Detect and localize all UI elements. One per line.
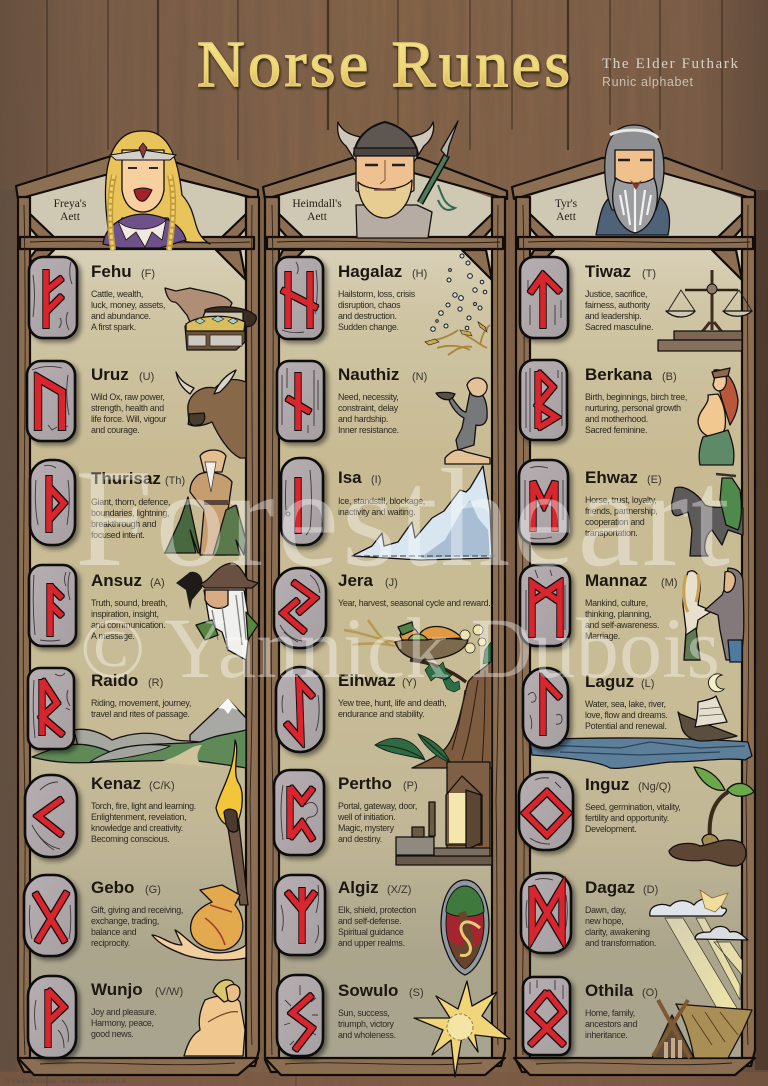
name: Jera	[338, 571, 374, 590]
letter: (X/Z)	[387, 884, 411, 896]
description: Torch, fire, light and learning.	[91, 801, 196, 811]
description: and transformation.	[585, 938, 656, 948]
letter: (D)	[643, 884, 658, 896]
rune row: Jera	[274, 568, 490, 660]
letter: (H)	[412, 268, 427, 280]
rune row: Eihwaz	[276, 642, 492, 768]
stone	[29, 257, 77, 338]
letter: (I)	[371, 474, 381, 486]
rune row: Raido	[28, 668, 246, 768]
subtitle: Runic alphabet	[602, 75, 694, 89]
rune row: Othila	[523, 977, 752, 1058]
portrait: Heimdall	[338, 121, 458, 238]
rune	[525, 792, 568, 835]
description: Water, sea, lake, river,	[585, 699, 666, 709]
description: and hardship.	[338, 414, 388, 424]
icon: cow and treasure chest	[165, 288, 256, 350]
description: Ice, standstill, blockage,	[338, 496, 425, 506]
stone	[523, 668, 568, 748]
stone	[277, 975, 323, 1056]
icon: horse and rider	[672, 474, 743, 556]
description: and destiny.	[338, 834, 382, 844]
description: and courage.	[91, 425, 139, 435]
stone	[520, 257, 568, 338]
description: and communication.	[91, 620, 165, 630]
name: Mannaz	[585, 571, 647, 590]
icon: giant in forest	[165, 450, 246, 555]
icon: shield with tree and serpent	[441, 880, 489, 975]
icon: hailstones on wheat	[425, 254, 490, 355]
name: Uruz	[91, 365, 129, 384]
rune row: Mannaz	[520, 565, 744, 662]
name: Ehwaz	[585, 468, 638, 487]
description: clarity, awakening	[585, 927, 650, 937]
description: Yew tree, hunt, life and death,	[338, 698, 446, 708]
description: cooperation and	[585, 517, 645, 527]
description: Sacred masculine.	[585, 322, 653, 332]
rune row: Nauthiz	[277, 361, 490, 464]
letter: (G)	[145, 884, 161, 896]
stone	[29, 565, 76, 646]
description: life force. Will, vigour	[91, 414, 166, 424]
name: Nauthiz	[338, 365, 399, 384]
name: Thurisaz	[91, 469, 161, 488]
label: Freya's Aett: Aett	[60, 211, 81, 223]
description: breakthrough and	[91, 519, 156, 529]
rune row: Dagaz	[521, 873, 748, 1010]
letter: (Th)	[165, 475, 185, 487]
letter: (O)	[642, 987, 658, 999]
letter: (P)	[403, 780, 418, 792]
description: transportation.	[585, 528, 638, 538]
rune row: Thurisaz	[30, 450, 246, 555]
name: Sowulo	[338, 981, 398, 1000]
description: constraint, delay	[338, 403, 399, 413]
description: disruption, chaos	[338, 300, 401, 310]
description: Potential and renewal.	[585, 721, 667, 731]
description: Home, family,	[585, 1008, 635, 1018]
letter: (M)	[661, 577, 678, 589]
rune row: Gebo	[24, 875, 246, 960]
stone	[275, 875, 325, 955]
rune row: Sowulo	[277, 975, 510, 1077]
description: Harmony, peace,	[91, 1018, 154, 1028]
description: Inner resistance.	[338, 425, 399, 435]
rune row: Ehwaz	[519, 460, 743, 556]
name: Kenaz	[91, 774, 141, 793]
description: Portal, gateway, door,	[338, 801, 417, 811]
icon: scales of justice	[658, 270, 752, 351]
description: Year, harvest, seasonal cycle and reward.	[338, 598, 490, 608]
stone	[25, 775, 77, 857]
description: Spiritual guidance	[338, 927, 404, 937]
description: Need, necessity,	[338, 392, 398, 402]
description: Birth, beginnings, birch tree,	[585, 392, 687, 402]
letter: (F)	[141, 268, 155, 280]
description: and upper realms.	[338, 938, 405, 948]
icon: Odin with raven	[176, 563, 258, 660]
watermark	[75, 441, 730, 696]
description: good news.	[91, 1029, 134, 1039]
name: Ansuz	[91, 571, 142, 590]
stone	[24, 875, 76, 956]
rune	[292, 995, 312, 1050]
description: Development.	[585, 824, 636, 834]
description: Horse, trust, loyalty,	[585, 495, 657, 505]
name: Gebo	[91, 878, 134, 897]
icon: sun	[414, 981, 510, 1077]
stone	[523, 977, 570, 1055]
stone	[27, 361, 75, 441]
icon: portal in tree	[396, 762, 492, 865]
description: inspiration, insight,	[91, 609, 159, 619]
stone	[276, 257, 323, 339]
icon: beggar woman with bowl	[436, 378, 490, 464]
name: Fehu	[91, 262, 132, 281]
letter: (B)	[662, 371, 677, 383]
description: well of initiation.	[337, 812, 395, 822]
description: inactivity and waiting.	[338, 507, 415, 517]
rune	[38, 378, 62, 430]
rune row: Ansuz	[29, 563, 258, 660]
name: Raido	[91, 671, 138, 690]
description: Mankind, culture,	[585, 598, 648, 608]
stone	[274, 568, 326, 648]
stone	[520, 565, 570, 646]
stone	[519, 460, 568, 544]
icon: man and woman holding hands	[683, 568, 744, 662]
panel: Tyr's Aett frame	[512, 158, 755, 1075]
portrait: Freya	[103, 131, 210, 250]
name: Berkana	[585, 365, 653, 384]
icon: spear	[420, 121, 458, 210]
description: and destruction.	[338, 311, 397, 321]
icon: pregnant woman	[698, 368, 738, 465]
description: A message.	[91, 631, 135, 641]
rune row: Uruz	[27, 361, 246, 458]
name: Algiz	[338, 878, 379, 897]
rune row: Berkana	[520, 360, 738, 465]
description: and motherhood.	[585, 414, 648, 424]
description: Becoming conscious.	[91, 834, 170, 844]
rune	[543, 680, 560, 735]
name: Eihwaz	[338, 671, 396, 690]
description: Enlightenment, revelation,	[91, 812, 186, 822]
rune	[287, 373, 310, 430]
stone	[276, 667, 324, 752]
rune	[46, 270, 62, 328]
rune	[538, 372, 556, 428]
name: Hagalaz	[338, 262, 402, 281]
description: love, flow and dreams.	[585, 710, 668, 720]
rune	[533, 482, 555, 531]
description: knowledge and creativity.	[91, 823, 183, 833]
description: A first spark.	[91, 322, 136, 332]
rune	[530, 992, 564, 1045]
description: exchange, trading,	[91, 916, 159, 926]
rune	[286, 682, 313, 740]
description: ancestors and	[585, 1019, 637, 1029]
description: Dawn, day,	[585, 905, 626, 915]
icon: mountain landscape	[32, 698, 246, 768]
rune row: Wunjo	[28, 976, 245, 1058]
description: Gift, giving and receiving,	[91, 905, 183, 915]
rune row: Inguz	[519, 767, 754, 866]
description: strength, health and	[91, 403, 164, 413]
label: Heimdall's Aett: Heimdall's	[292, 198, 342, 210]
description: fertility and opportunity.	[585, 813, 669, 823]
description: Truth, sound, breath,	[91, 598, 167, 608]
rune	[42, 680, 63, 735]
description: Hailstorm, loss, crisis	[338, 289, 416, 299]
rune	[532, 583, 560, 637]
rune	[295, 478, 301, 533]
letter: (J)	[385, 577, 398, 589]
description: and self-awareness.	[585, 620, 659, 630]
name: Laguz	[585, 672, 634, 691]
description: nurturing, personal growth	[585, 403, 681, 413]
rune	[49, 476, 64, 532]
description: Riding, movement, journey,	[91, 698, 191, 708]
description: triumph, victory	[338, 1019, 395, 1029]
icon: yew tree	[375, 642, 492, 768]
rune	[530, 275, 560, 328]
letter: (Y)	[402, 677, 417, 689]
letter: (N)	[412, 371, 427, 383]
stone	[281, 458, 323, 545]
description: Sudden change.	[338, 322, 399, 332]
stone	[28, 668, 74, 749]
name: Tiwaz	[585, 262, 631, 281]
description: inheritance.	[585, 1030, 628, 1040]
rune row: Hagalaz	[276, 254, 490, 355]
rune	[38, 799, 62, 835]
rune	[50, 584, 62, 636]
letter: (V/W)	[155, 986, 183, 998]
description: focused intent.	[91, 530, 145, 540]
description: thinking, planning,	[585, 609, 651, 619]
letter: (L)	[641, 678, 654, 690]
label: Tyr's Aett: Tyr's	[555, 198, 578, 210]
icon: wild ox	[176, 370, 246, 458]
letter: (U)	[139, 371, 154, 383]
name: Isa	[338, 468, 362, 487]
rune row: Pertho	[274, 762, 492, 865]
description: Wild Ox, raw power,	[91, 392, 165, 402]
description: luck, money, assets,	[91, 300, 165, 310]
stone	[277, 361, 324, 441]
description: Seed, germination, vitality,	[585, 802, 681, 812]
letter: (E)	[647, 474, 662, 486]
description: balance and	[91, 927, 137, 937]
name: Inguz	[585, 775, 629, 794]
stone	[520, 360, 567, 440]
stone	[30, 460, 75, 545]
name: Dagaz	[585, 878, 635, 897]
letter: (A)	[150, 577, 165, 589]
letter: (R)	[148, 677, 163, 689]
panel: Heimdall's Aett frame	[263, 158, 507, 1075]
description: and abundance.	[91, 311, 151, 321]
description: fairness, authority	[585, 300, 651, 310]
description: Cattle, wealth,	[91, 289, 143, 299]
description: new hope,	[585, 916, 623, 926]
rune	[290, 787, 313, 840]
name: Othila	[585, 981, 634, 1000]
description: and leadership.	[585, 311, 642, 321]
rune row: Isa	[281, 458, 495, 560]
description: endurance and stability.	[338, 709, 424, 719]
footer credit: © Yannick Dubois - www.forestheart.co.uk	[5, 1077, 127, 1085]
description: Sacred feminine.	[585, 425, 647, 435]
rune row: Algiz	[275, 875, 489, 975]
portrait: Tyr	[596, 125, 669, 235]
description: travel and rites of passage.	[91, 709, 190, 719]
description: Marriage.	[585, 631, 620, 641]
rune	[48, 990, 64, 1047]
icon: torch	[216, 740, 248, 905]
icon: harvest bowl	[344, 620, 486, 660]
icon: embracing couple	[184, 980, 245, 1056]
description: Joy and pleasure.	[91, 1007, 156, 1017]
icon: river and longship	[530, 674, 752, 768]
icon: sprouting seed	[669, 767, 754, 866]
description: Justice, sacrifice,	[585, 289, 647, 299]
name: Wunjo	[91, 980, 143, 999]
rune row: Tiwaz	[520, 257, 752, 351]
stone	[521, 873, 571, 953]
watermark: Forestheart	[75, 441, 730, 596]
description: boundaries, lightning,	[91, 508, 169, 518]
description: Giant, thorn, defence,	[91, 497, 170, 507]
stone	[274, 770, 324, 855]
panel: Freya's Aett frame	[16, 157, 259, 1075]
label: Tyr's Aett: Aett	[556, 211, 577, 223]
icon: icy mountains	[352, 466, 495, 560]
rune	[287, 888, 315, 943]
description: Elk, shield, protection	[338, 905, 416, 915]
description: and self-defense.	[338, 916, 401, 926]
icon: thatched longhouse	[652, 1000, 752, 1058]
subtitle	[602, 56, 738, 89]
rune row: Fehu	[29, 257, 256, 350]
rune	[283, 582, 315, 632]
letter: (C/K)	[149, 780, 175, 792]
letter: (T)	[642, 268, 656, 280]
rune row: Laguz	[523, 668, 752, 768]
label: Heimdall's Aett: Aett	[307, 211, 328, 223]
letter: (S)	[409, 987, 424, 999]
stone	[519, 772, 573, 850]
label: Freya's Aett: Freya's	[54, 198, 87, 210]
stone	[28, 976, 76, 1058]
description: friends, partnership,	[585, 506, 658, 516]
subtitle: The Elder Futhark	[602, 56, 738, 72]
rune row: Kenaz	[25, 740, 248, 905]
rune	[282, 272, 317, 328]
rune	[35, 892, 67, 942]
title: Norse Runes	[197, 28, 570, 101]
description: and wholeness.	[338, 1030, 396, 1040]
watermark: © Yannick Dubois	[80, 600, 720, 696]
description: Sun, success,	[338, 1008, 390, 1018]
icon: gift pouch on hand	[152, 885, 246, 960]
description: Magic, mystery	[338, 823, 395, 833]
icon: dawn clouds, rays and butterfly	[650, 890, 748, 1010]
rune	[532, 887, 562, 938]
name: Pertho	[338, 774, 392, 793]
description: reciprocity.	[91, 938, 130, 948]
letter: (Ng/Q)	[638, 781, 671, 793]
